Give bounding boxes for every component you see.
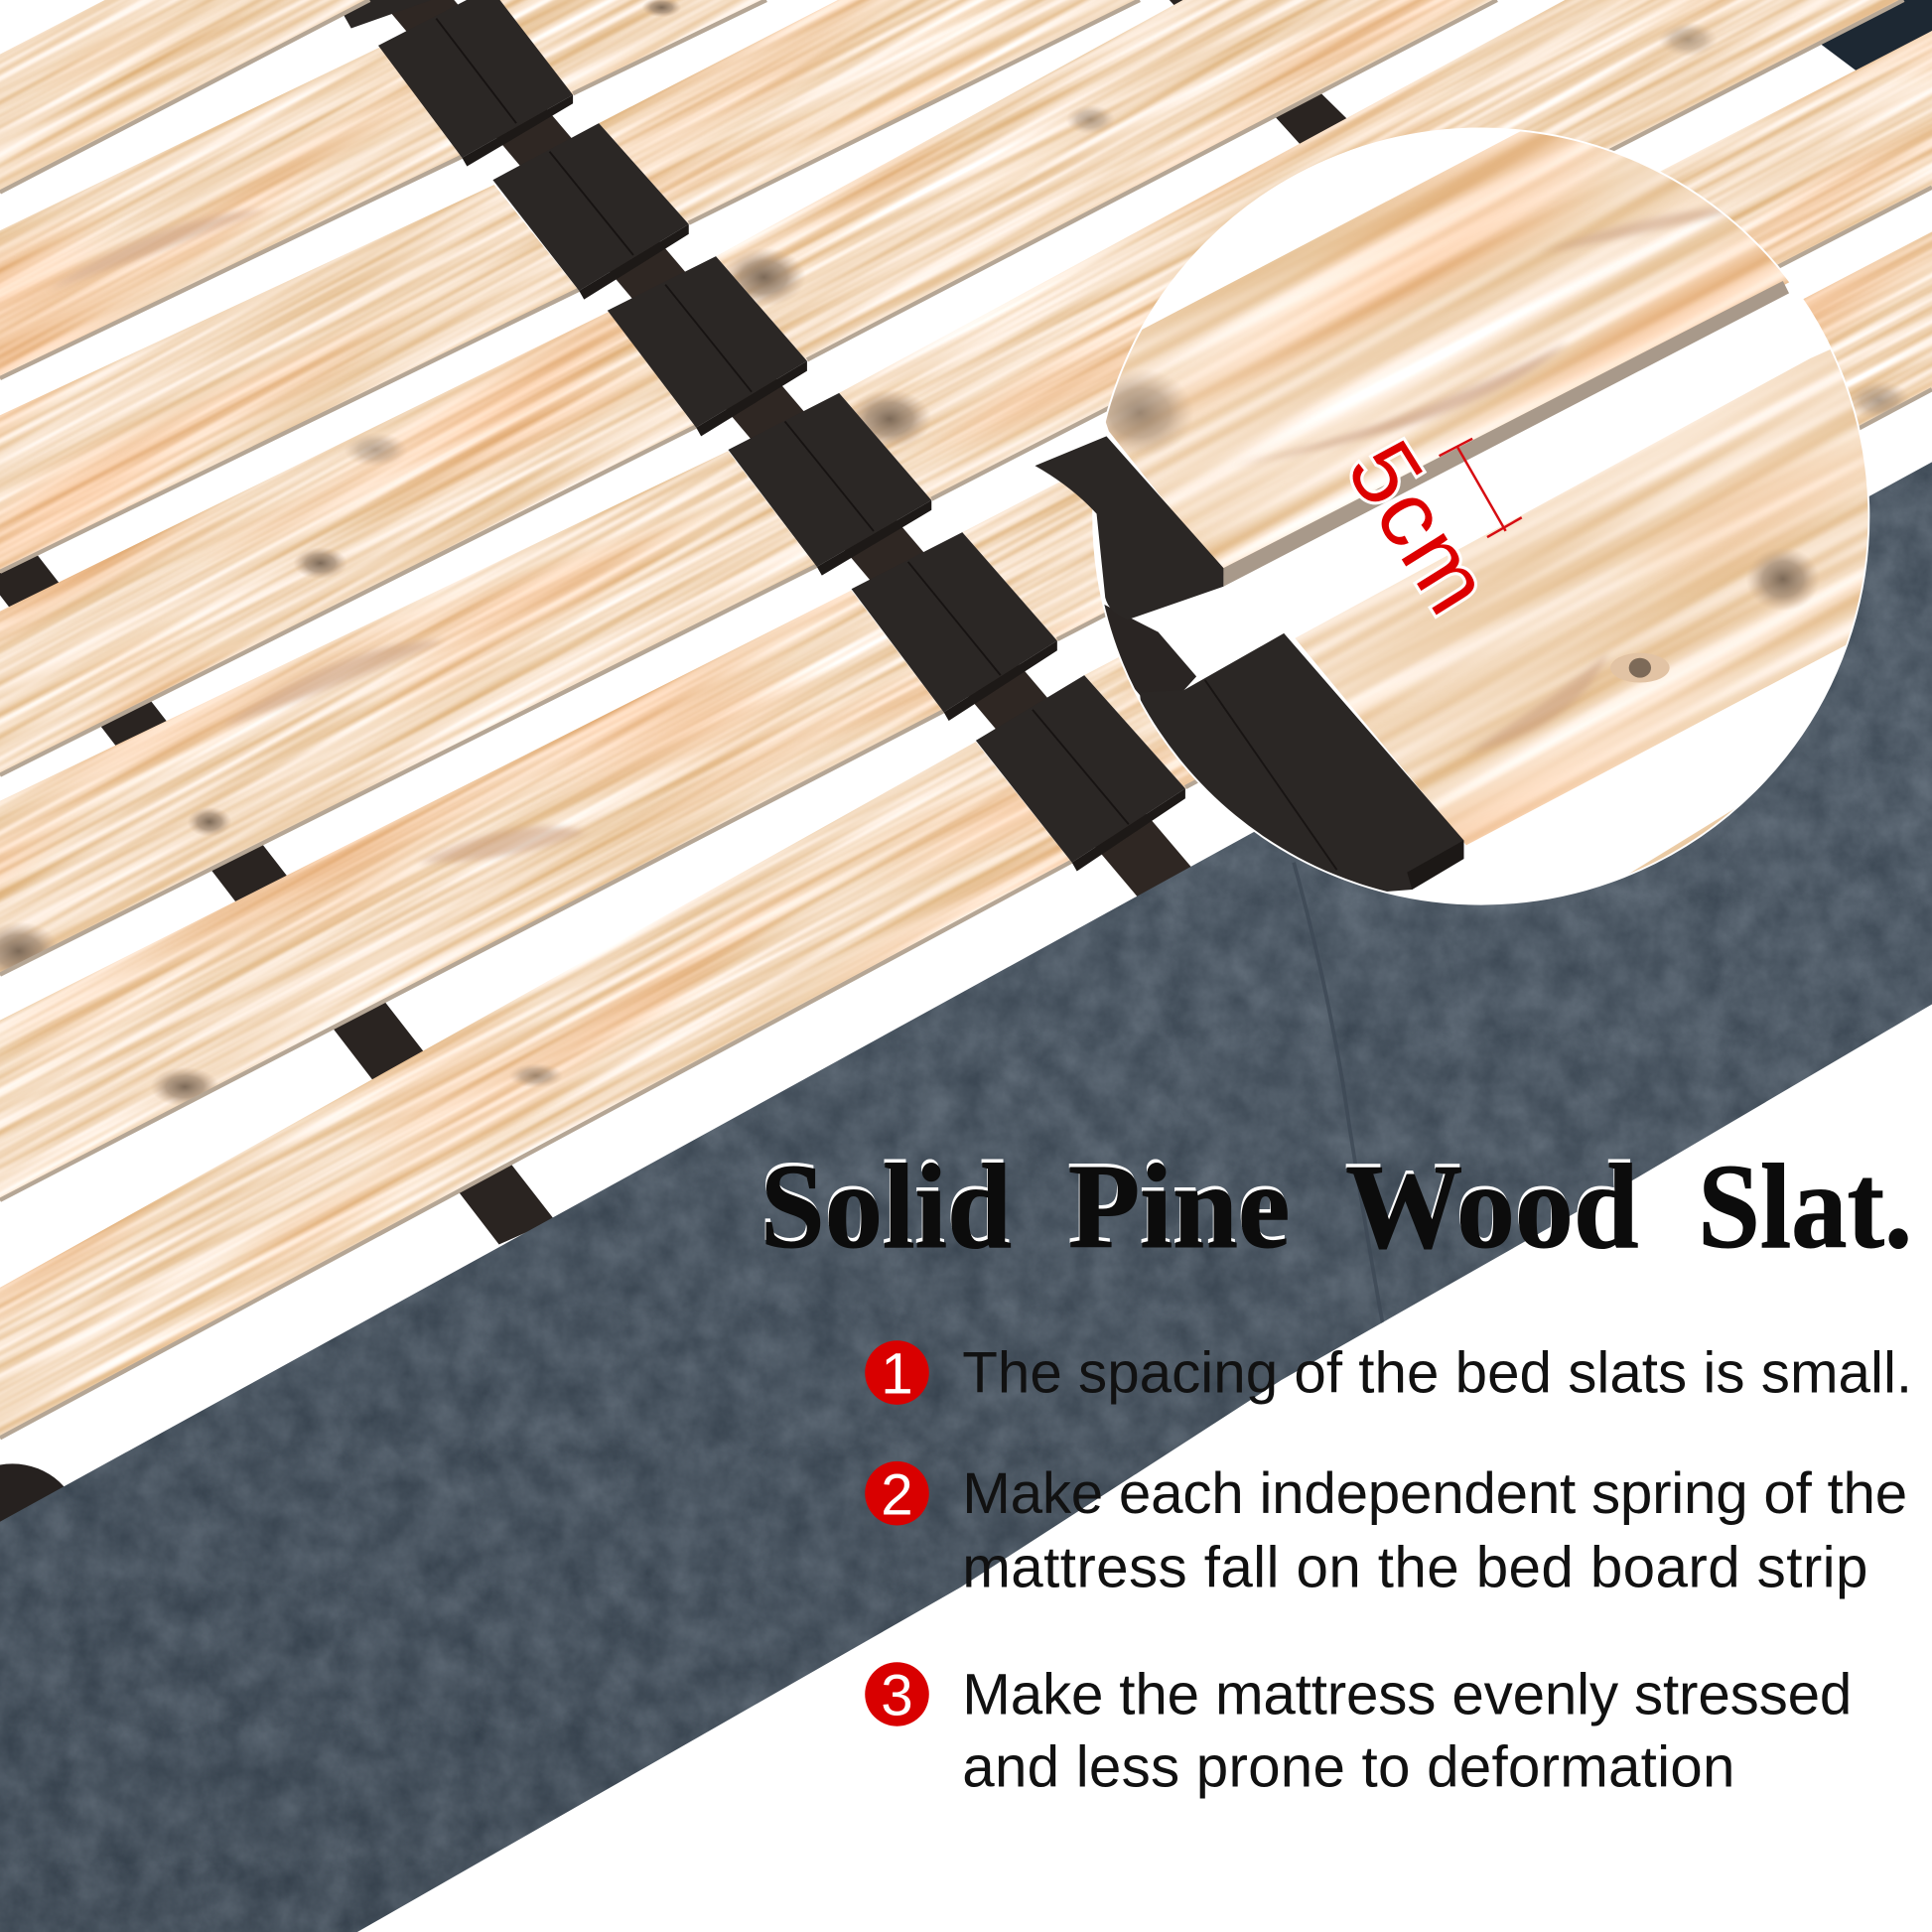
frame seam [1294,863,1386,1343]
wood slats [0,0,1932,1455]
point 2 [865,1461,1907,1600]
slat lower edges [0,0,1932,1438]
point 2: 2 [881,1462,913,1527]
upholstered bed frame [0,456,1932,1932]
magnified wood slats [1106,131,1868,874]
magnified holder pad, lower [1140,633,1463,899]
title: Solid [760,1141,1012,1274]
wood knots [0,0,1911,1146]
round leg behind the frame [0,1463,78,1587]
point 1: 1 [881,1342,913,1407]
title [759,1137,1912,1274]
magnifier circle showing 5cm gap [1092,127,1870,905]
title: Solid [759,1137,1011,1270]
title: Slat. [1698,1141,1912,1274]
title: Slat. [1697,1137,1911,1270]
title: Wood [1344,1137,1637,1270]
support straps under the slats [0,0,1932,1244]
point 2: mattress fall on the bed board strip [962,1535,1867,1600]
magnified holder pad, upper [1035,436,1223,620]
5cm measurement bracket [1440,439,1522,537]
point 3 [865,1662,1852,1800]
black slat holder pads [378,0,1185,871]
point 3: 3 [881,1664,913,1728]
point 3: Make the mattress evenly stressed [962,1662,1852,1726]
title: Pine [1068,1141,1290,1274]
point 1: The spacing of the bed slats is small. [962,1340,1912,1405]
5cm measurement label: 5cm [1327,423,1512,631]
title: Wood [1345,1141,1639,1274]
title: Pine [1067,1137,1289,1270]
point 2: Make each independent spring of the [962,1461,1907,1526]
point 3: and less prone to deformation [962,1735,1734,1800]
slat edge shadow [1223,281,1789,587]
magnified strap [1103,604,1196,702]
